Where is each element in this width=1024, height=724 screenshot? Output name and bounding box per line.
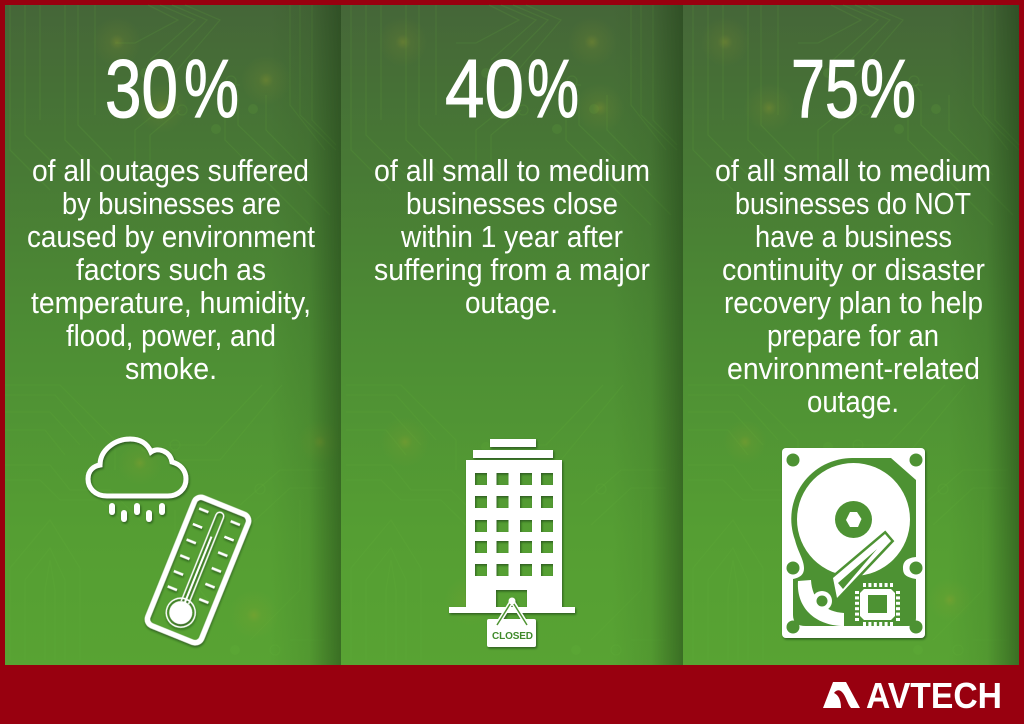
text block: businesses close: within 1 year after xyxy=(400,219,623,254)
panel background 2 xyxy=(341,5,683,665)
text block: businesses close: suffering from a major xyxy=(374,252,650,287)
heading: 75%: 75 xyxy=(791,42,859,135)
logo wordmark: AVTECH xyxy=(866,675,1002,716)
text block: environment factors: by businesses are xyxy=(62,186,281,221)
text block: no continuity plan xyxy=(715,153,991,419)
footer logo: AVTECH xyxy=(823,675,1002,716)
icon: rain cloud xyxy=(88,439,186,522)
actuator arm xyxy=(798,534,891,626)
heading: 30%: % xyxy=(184,42,239,135)
text block: businesses close: of all small to medium xyxy=(374,153,650,188)
panel: 40% of businesses close xyxy=(341,5,683,665)
icon: closed building xyxy=(449,439,575,647)
chip xyxy=(855,583,900,626)
heading: 40% xyxy=(445,42,579,135)
heading: 30%: 30 xyxy=(105,42,178,135)
text block: environment factors: of all outages suffered xyxy=(32,153,309,188)
logo mark xyxy=(823,682,860,708)
text block: no continuity plan: environment-related xyxy=(727,351,980,386)
closed sign xyxy=(487,598,536,647)
closed sign: CLOSED xyxy=(492,631,533,642)
text block: no continuity plan: outage. xyxy=(807,384,899,419)
heading: 40%: % xyxy=(527,42,579,135)
text block: businesses close xyxy=(374,153,650,320)
text block: environment factors: flood, power, and xyxy=(66,318,276,353)
text block: environment factors xyxy=(27,153,315,386)
heading: 75%: % xyxy=(860,42,916,135)
text block: environment factors: caused by environment xyxy=(27,219,315,254)
text block: no continuity plan: recovery plan to help xyxy=(724,285,983,320)
icon: thermometer xyxy=(145,495,251,645)
panel: 30% of outages xyxy=(5,5,342,665)
heading: 40%: 40 xyxy=(445,42,524,135)
text block: businesses close: businesses close xyxy=(406,186,618,221)
panel background 1 xyxy=(5,5,342,665)
text block: no continuity plan: prepare for an xyxy=(767,318,939,353)
text block: no continuity plan: businesses do NOT xyxy=(735,186,971,221)
icon: hard drive xyxy=(782,448,925,638)
text block: environment factors: factors such as xyxy=(76,252,266,287)
text block: environment factors: temperature, humidity, xyxy=(31,285,311,320)
text block: environment factors: smoke. xyxy=(125,351,217,386)
panel: 75% have no plan xyxy=(683,5,1019,665)
heading: 30% xyxy=(105,42,239,135)
text block: businesses close: outage. xyxy=(465,285,558,320)
panel background 3 xyxy=(683,5,1019,665)
text block: no continuity plan: have a business xyxy=(755,219,952,254)
text block: no continuity plan: continuity or disaster xyxy=(722,252,985,287)
text block: no continuity plan: of all small to medium xyxy=(715,153,991,188)
